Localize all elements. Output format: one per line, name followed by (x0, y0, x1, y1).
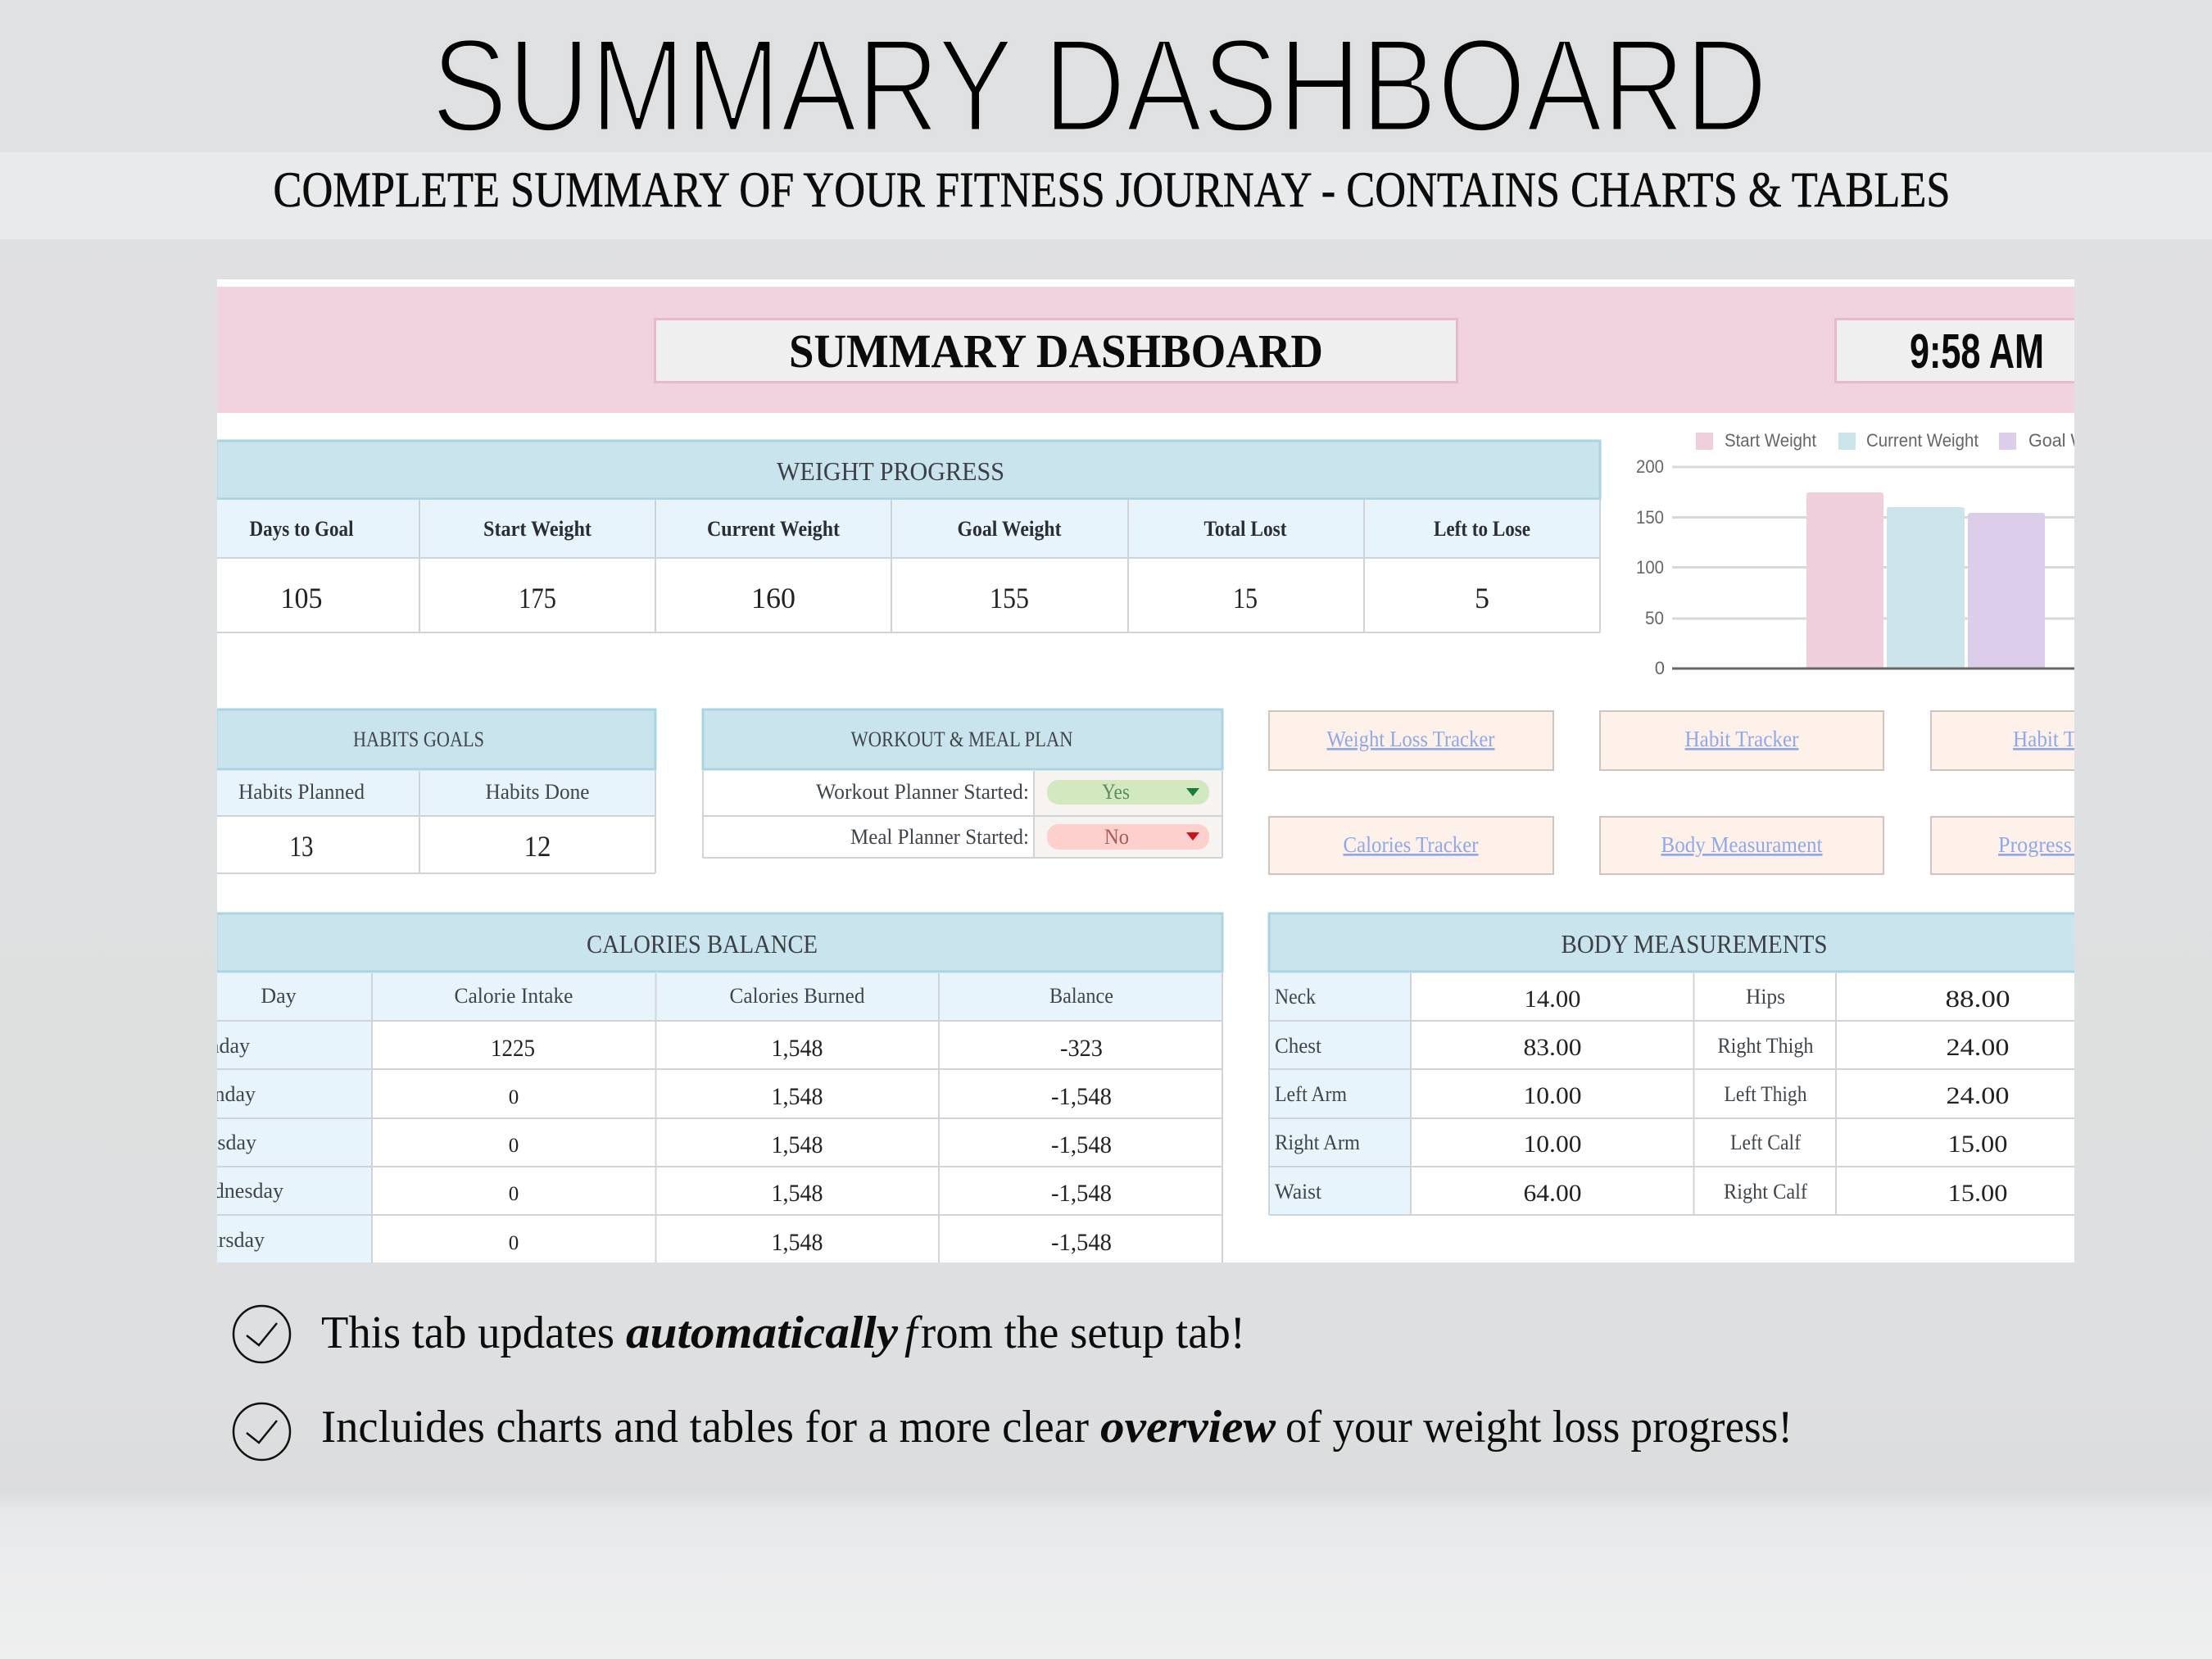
weight labels: Left to Lose (1434, 517, 1530, 541)
body labels left (1275, 985, 1360, 1203)
body values right: 15.00 (1948, 1131, 2007, 1158)
bar chart: weight (1637, 433, 2074, 674)
panel: habits goals: Habits Done (485, 780, 590, 804)
tracker link buttons: Calories Tracker (1344, 832, 1479, 857)
status pill: no (1047, 824, 1209, 850)
calories values: -1,548 (1051, 1083, 1112, 1110)
calories day names: Thursday (184, 1228, 265, 1252)
body values left: 10.00 (1524, 1082, 1581, 1109)
panel: habits goals: Habits Planned (238, 780, 365, 804)
body values right: 24.00 (1947, 1034, 2009, 1061)
calories values: 1,548 (772, 1180, 823, 1207)
calories column headings: Calorie Intake (454, 984, 573, 1008)
weight labels: Total Lost (1204, 517, 1287, 541)
body values left: 64.00 (1524, 1180, 1581, 1207)
bullet text 2: overview (1100, 1402, 1276, 1453)
subtitle band: COMPLETE SUMMARY OF YOUR FITNESS JOURNAY - CONTAINS CHARTS & TABLES (274, 163, 1950, 218)
bullet text 2: of your weight loss progress! (1285, 1402, 1793, 1453)
calories day names: Tuesday (185, 1131, 256, 1154)
calories values: -1,548 (1051, 1180, 1112, 1207)
calories day names (217, 1037, 283, 1252)
title: SUMMARY DASHBOARD (431, 11, 1768, 160)
calories values: -1,548 (1051, 1131, 1112, 1158)
chart axis labels: 200 (1636, 456, 1664, 477)
panel: workout and meal plan (703, 709, 1222, 858)
icon: check circle 1 (233, 1306, 290, 1362)
calories day names: Monday (184, 1082, 256, 1106)
chart legend: Goal Weight (2028, 430, 2125, 451)
calories values: 1,548 (772, 1229, 823, 1256)
chart legend: Current Weight (1866, 430, 1979, 451)
body values right: 24.00 (1947, 1082, 2009, 1109)
panel: habits goals: 12 (524, 830, 551, 863)
calories column headings: Calories Burned (729, 984, 865, 1008)
body values left: 83.00 (1524, 1034, 1581, 1061)
panel: dashboard screenshot (184, 279, 2177, 1262)
body values left: 14.00 (1524, 986, 1581, 1013)
calories values: 0 (509, 1232, 519, 1254)
weight labels: Days to Goal (249, 517, 354, 541)
weight values: 105 (280, 582, 323, 614)
chart axis labels: 150 (1636, 507, 1664, 528)
panel: habits goals: 13 (290, 830, 313, 863)
panel: workout and meal plan: Workout Planner Started: (816, 780, 1029, 804)
body values right: 15.00 (1948, 1180, 2007, 1207)
chart axis labels: 50 (1645, 608, 1664, 628)
body labels right: Right Thigh (1717, 1034, 1814, 1058)
calories values: 1,548 (772, 1131, 823, 1158)
panel: calories balance table (184, 913, 1222, 1262)
dashboard title box (655, 320, 1457, 382)
chart legend (1696, 433, 2074, 451)
icon: check circle 2 (233, 1403, 290, 1460)
panel: workout and meal plan: WORKOUT & MEAL PLAN (850, 728, 1073, 751)
body labels right (1717, 985, 1814, 1203)
body values left: 10.00 (1524, 1131, 1581, 1158)
calories values: -1,548 (1051, 1229, 1112, 1256)
bullet text 1 (321, 1308, 1245, 1358)
weight values: 15 (1233, 582, 1258, 614)
calories values: 0 (509, 1183, 519, 1205)
body labels right: Right Calf (1724, 1180, 1807, 1203)
body values right: 88.00 (1945, 986, 2010, 1013)
bullet text 2: Incluides charts and tables for a more clear (321, 1402, 1089, 1453)
tracker link buttons: Progress Tracker (1998, 832, 2142, 857)
chart axis labels: 100 (1636, 557, 1664, 578)
weight values: 155 (990, 582, 1029, 614)
calories values: 0 (509, 1086, 519, 1108)
body labels left: Right Arm (1275, 1131, 1360, 1154)
panel: calories balance table: CALORIES BALANCE (587, 929, 818, 959)
status pill: no: No (1104, 825, 1129, 849)
status pill: yes: Yes (1102, 780, 1130, 804)
tracker link buttons: Habit Tracker (1684, 727, 1799, 751)
panel: habits goals: HABITS GOALS (353, 728, 484, 751)
dashboard title box: SUMMARY DASHBOARD (789, 324, 1323, 378)
chart bars (1806, 492, 2045, 669)
bullet text 1: This tab updates (321, 1308, 614, 1358)
bullet text 2 (321, 1402, 1793, 1453)
weight labels (249, 521, 1530, 541)
clock box: 9:58 AM (1910, 324, 2044, 378)
weight values: 160 (751, 582, 796, 614)
panel: body measurements table (1269, 913, 2170, 1215)
calories column headings: Day (261, 984, 297, 1008)
body labels left: Neck (1275, 985, 1316, 1009)
panel: weight progress table: WEIGHT PROGRESS (777, 456, 1004, 486)
weight values: 175 (519, 582, 556, 614)
panel: weight progress table (216, 441, 1600, 632)
weight labels: Start Weight (483, 517, 592, 541)
body labels right: Left Thigh (1724, 1082, 1807, 1106)
dashboard header band (217, 287, 2097, 413)
weight values: 5 (1475, 582, 1489, 614)
weight labels: Goal Weight (957, 517, 1062, 541)
calories values (491, 1035, 1112, 1256)
panel: workout and meal plan: Meal Planner Started: (850, 825, 1029, 849)
chart legend: Start Weight (1725, 430, 1816, 451)
chart axis labels: 0 (1655, 658, 1665, 678)
body labels right: Left Calf (1730, 1131, 1801, 1154)
calories values: 1,548 (772, 1035, 823, 1062)
bullet text 1: automatically (626, 1308, 899, 1358)
calories day names: Wednesday (186, 1179, 283, 1203)
calories values: 1,548 (772, 1083, 823, 1110)
body values right (1945, 986, 2010, 1207)
calories day names: Sunday (186, 1034, 250, 1058)
calories column headings (261, 988, 1113, 1008)
status pill: yes (1047, 780, 1209, 805)
body values left (1524, 986, 1581, 1207)
weight values (283, 588, 1489, 608)
calories values: 0 (509, 1135, 519, 1157)
body labels left: Waist (1275, 1180, 1322, 1203)
body labels right: Hips (1746, 985, 1785, 1009)
clock box (1835, 320, 2097, 382)
bullet text 1: f (904, 1308, 923, 1358)
calories values: 1225 (491, 1035, 535, 1062)
body labels left: Chest (1275, 1034, 1322, 1058)
weight labels: Current Weight (707, 517, 840, 541)
subtitle band (0, 152, 2212, 239)
tracker link buttons: Habit Tracker (2013, 727, 2127, 751)
chart axis labels (1636, 456, 1665, 678)
calories column headings: Balance (1049, 984, 1113, 1008)
body labels left: Left Arm (1275, 1082, 1347, 1106)
calories values: -323 (1060, 1035, 1103, 1062)
panel: body measurements table: BODY MEASUREMENTS (1562, 929, 1827, 959)
tracker link buttons: Body Measurament (1661, 832, 1823, 857)
panel: habits goals (216, 709, 655, 873)
tracker link buttons: Weight Loss Tracker (1327, 727, 1495, 751)
bullet text 1: rom the setup tab! (921, 1308, 1245, 1358)
tracker link buttons (1268, 710, 2074, 875)
